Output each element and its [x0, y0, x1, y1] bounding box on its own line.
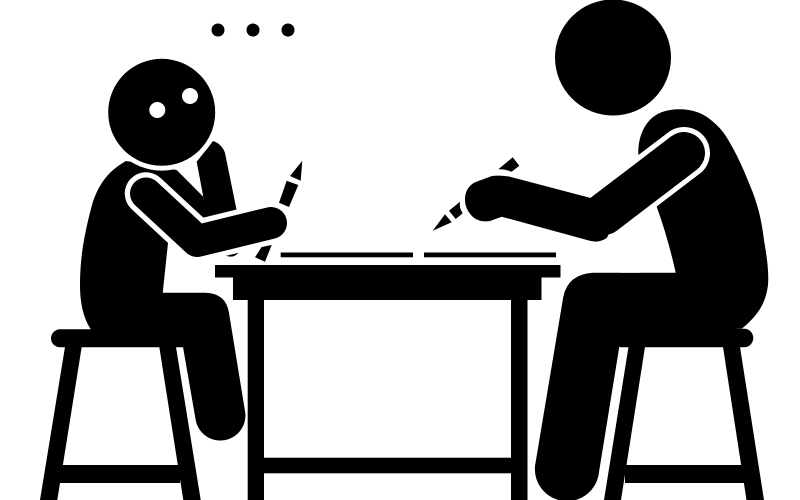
left head halo: [103, 54, 220, 171]
left pencil: [255, 161, 302, 262]
left figure leg: [120, 293, 245, 441]
right head: [555, 0, 671, 116]
white gap between torso and arm: [620, 207, 676, 273]
left arm: [146, 194, 271, 241]
left figure supporting arm: [197, 141, 237, 224]
right stool: [604, 329, 764, 500]
right pencil: [433, 157, 519, 231]
left eyes: [149, 88, 198, 118]
table: [215, 265, 560, 500]
thinking dots: [212, 24, 294, 36]
left stool: [40, 329, 201, 500]
papers on the table: [281, 252, 556, 257]
left crescent under elbow: [219, 248, 241, 257]
right figure torso: [638, 109, 768, 332]
left arm outline: [146, 194, 271, 241]
right forearm and hand: [465, 176, 625, 242]
left figure: child: [80, 54, 302, 441]
right figure: adult: [433, 0, 768, 500]
right arm outline: [604, 153, 684, 214]
right upper arm: [604, 153, 684, 214]
left figure torso: [80, 161, 204, 331]
left head: [108, 59, 215, 166]
right figure leg: [535, 273, 700, 500]
